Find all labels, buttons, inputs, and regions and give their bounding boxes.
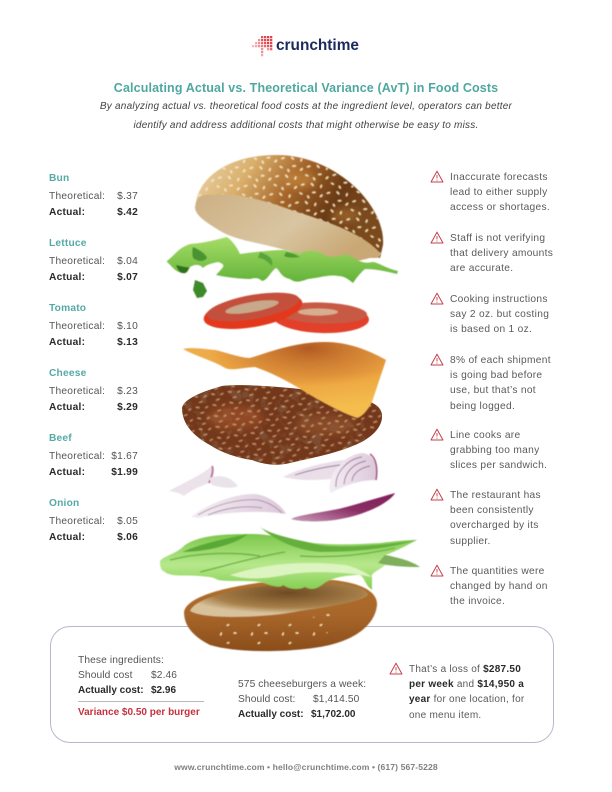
- warning: inaccurate forecasts: Inaccurate forecasts: [450, 172, 548, 183]
- warning: overcharged: overcharged by its: [450, 520, 539, 531]
- ingredient costs: bun: Theoretical:: [49, 191, 105, 202]
- bottom bun: [184, 579, 377, 651]
- top bun: [195, 155, 383, 263]
- ingredient costs: bun: Bun: [49, 173, 69, 184]
- warning: overcharged: been consistently: [450, 505, 534, 516]
- ingredient costs: beef: Actual:: [49, 467, 85, 478]
- ingredient costs: onion: $.06: [117, 532, 138, 543]
- summary: per week: $1,702.00: [311, 709, 356, 720]
- warning: quantities changed: changed by hand on: [450, 581, 548, 592]
- ingredient costs: lettuce: Theoretical:: [49, 256, 105, 267]
- warning: quantities changed: The quantities were: [450, 566, 545, 577]
- summary: per week: Should cost:: [238, 694, 296, 705]
- summary: per week: $1,414.50: [313, 694, 359, 705]
- warning: overcharged: [430, 488, 541, 547]
- ingredient costs: cheese: Actual:: [49, 402, 85, 413]
- ingredient costs: tomato: $.10: [117, 321, 138, 332]
- logo: crunchtime: [252, 36, 359, 56]
- ingredient costs: onion: Onion: [49, 498, 79, 509]
- tomato slices: [201, 287, 369, 335]
- ingredient costs: onion: Theoretical:: [49, 516, 105, 527]
- ingredient costs: tomato: [49, 303, 138, 348]
- ingredient costs: onion: $.05: [117, 516, 138, 527]
- ingredient costs: tomato: $.13: [117, 337, 138, 348]
- ingredient costs: bun: $.42: [117, 207, 138, 218]
- warning: inaccurate forecasts: access or shortages.: [450, 202, 550, 213]
- ingredient costs: lettuce: $.04: [117, 256, 138, 267]
- tomato slice front: [201, 287, 305, 335]
- logo: crunchtime: crunchtime: [276, 37, 359, 54]
- warning: staff not verifying: are accurate.: [450, 263, 513, 274]
- warning: cooking instructions: is based on 1 oz.: [450, 324, 532, 335]
- ingredient costs: tomato: Actual:: [49, 337, 85, 348]
- summary: per burger: These ingredients:: [78, 655, 164, 666]
- summary: per week: 575 cheeseburgers a week:: [238, 679, 366, 690]
- ingredient costs: beef: $1.67: [111, 451, 138, 462]
- warning: shipment spoilage: is going bad before: [450, 370, 542, 381]
- footer contact line: www.crunchtime.com • hello@crunchtime.com • (617) 567-5228: [174, 762, 438, 772]
- lettuce fragment: [193, 280, 207, 298]
- bottom bun sesame: [205, 612, 336, 648]
- summary: per burger: $2.96: [151, 685, 176, 696]
- intro text: By analyzing actual vs. theoretical food costs at the ingredient level, operators can better: [100, 101, 512, 112]
- warning: shipment spoilage: being logged.: [450, 401, 515, 412]
- panel: summary box: [50, 626, 554, 743]
- onion piece right: [283, 453, 377, 493]
- ingredient costs: beef: Beef: [49, 433, 72, 444]
- intro text: [100, 101, 512, 130]
- warning: quantities changed: [430, 564, 548, 607]
- lower lettuce: [160, 527, 420, 590]
- warning: cooking instructions: Cooking instructions: [450, 294, 548, 305]
- onion piece purple: [291, 493, 395, 521]
- ingredient costs: onion: Actual:: [49, 532, 85, 543]
- ingredient costs: bun: [49, 173, 138, 218]
- summary: per burger: $2.46: [151, 670, 177, 681]
- warning: overcharged: supplier.: [450, 536, 491, 547]
- summary: total loss callout: per week and $14,950 a: [409, 679, 524, 690]
- title: Calculating Actual vs. Theoretical Variance (AvT) in Food Costs: [114, 81, 498, 95]
- ingredient costs: beef: $1.99: [111, 467, 138, 478]
- ingredient costs: lettuce: $.07: [117, 272, 138, 283]
- summary: total loss callout: [390, 662, 524, 721]
- warning: line cooks: Line cooks are: [450, 430, 520, 441]
- upper lettuce: [167, 237, 398, 283]
- summary: per burger: [78, 655, 204, 718]
- summary: total loss callout: That’s a loss of $287.50: [409, 664, 521, 675]
- ingredient costs: tomato: Theoretical:: [49, 321, 105, 332]
- ingredient costs: beef: [49, 433, 138, 478]
- warning: line cooks: slices per sandwich.: [450, 460, 547, 471]
- top bun crust: [196, 155, 383, 258]
- ingredient costs: bun: $.37: [117, 191, 138, 202]
- onion piece left: [169, 466, 238, 496]
- ingredient costs: lettuce: Lettuce: [49, 238, 87, 249]
- tomato slice back: [273, 301, 369, 335]
- ingredient costs: tomato: Tomato: [49, 303, 86, 314]
- warning: cooking instructions: say 2 oz. but costing: [450, 309, 549, 320]
- red onion pieces: [169, 453, 395, 521]
- cheese slice: [183, 342, 386, 418]
- patty sesame flecks: [182, 385, 382, 465]
- summary: per week: Actually cost:: [238, 709, 304, 720]
- warning: staff not verifying: that delivery amounts: [450, 248, 553, 259]
- ingredient costs: lettuce: [49, 238, 138, 283]
- summary: total loss callout: one menu item.: [409, 710, 481, 721]
- warning: inaccurate forecasts: lead to either supply: [450, 187, 547, 198]
- ingredient costs: cheese: [49, 368, 138, 413]
- bottom bun cut face: [190, 583, 368, 617]
- warning: line cooks: grabbing too many: [450, 445, 540, 456]
- summary: per burger: Variance $0.50 per burger: [78, 707, 200, 718]
- ingredient costs: cheese: Theoretical:: [49, 386, 105, 397]
- summary: per week: [238, 679, 366, 720]
- summary: total loss callout: year for one location, for: [409, 694, 524, 705]
- warning: inaccurate forecasts: [430, 170, 550, 213]
- intro text: identify and address additional costs that might otherwise be easy to miss.: [133, 120, 478, 130]
- warning: shipment spoilage: use, but that’s not: [450, 385, 536, 396]
- ingredient costs: cheese: $.29: [117, 402, 138, 413]
- summary: per burger: Should cost: [78, 670, 133, 681]
- ingredient costs: lettuce: Actual:: [49, 272, 85, 283]
- warning: staff not verifying: Staff is not verifying: [450, 233, 545, 244]
- ingredient costs: beef: Theoretical:: [49, 451, 105, 462]
- ingredient costs: onion: [49, 498, 138, 543]
- bottom bun crust: [184, 579, 377, 651]
- onion piece centre: [191, 494, 286, 518]
- ingredient costs: cheese: $.23: [117, 386, 138, 397]
- warning: overcharged: The restaurant has: [450, 490, 541, 501]
- warning: staff not verifying: [430, 232, 553, 274]
- beef patty: [182, 385, 382, 465]
- warning: line cooks: [430, 428, 547, 471]
- summary: per burger: Actually cost:: [78, 685, 144, 696]
- warning: shipment spoilage: [430, 354, 551, 412]
- warning: cooking instructions: [430, 292, 549, 335]
- warning: shipment spoilage: 8% of each shipment: [450, 355, 551, 366]
- warning: quantities changed: the invoice.: [450, 596, 505, 607]
- top bun cut face: [195, 194, 380, 263]
- ingredient costs: bun: Actual:: [49, 207, 85, 218]
- ingredient costs: cheese: Cheese: [49, 368, 86, 379]
- patty body: [182, 385, 382, 465]
